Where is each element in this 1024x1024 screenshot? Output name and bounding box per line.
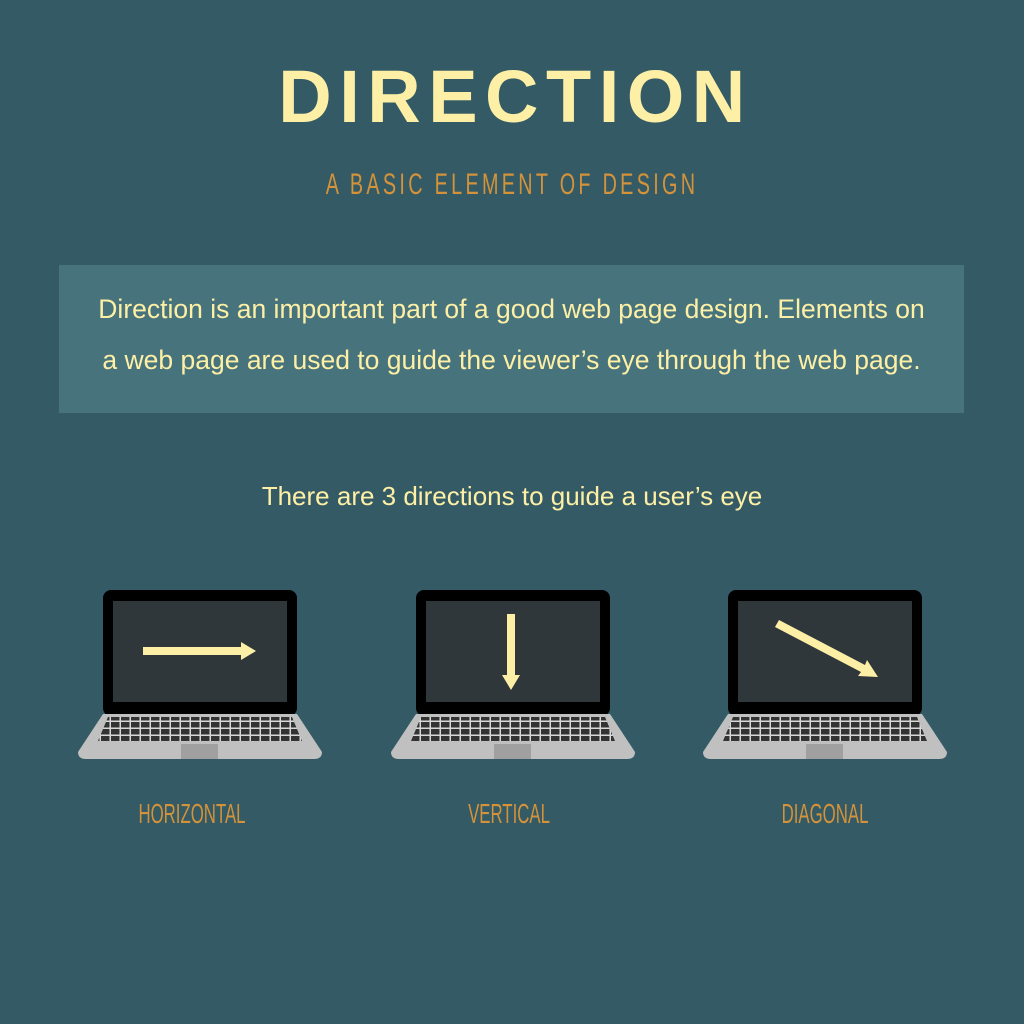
- lead text: There are 3 directions to guide a user’s eye: [262, 481, 762, 511]
- label: horizontal: HORIZONTAL: [138, 798, 246, 829]
- arrow: down: [502, 614, 520, 690]
- subtitle: A BASIC ELEMENT OF DESIGN: [326, 168, 698, 201]
- arrow: right: [143, 642, 256, 660]
- label: vertical: VERTICAL: [468, 798, 550, 829]
- intro box: Direction is an important part of a good web page design. Elements on: [98, 294, 925, 324]
- arrow: diagonal: [775, 620, 878, 677]
- laptop: horizontal: [78, 590, 322, 759]
- laptop: vertical: [391, 590, 635, 759]
- title: DIRECTION: [278, 55, 753, 138]
- intro box: a web page are used to guide the viewer’s eye through the web page.: [102, 345, 921, 375]
- intro box: [59, 265, 964, 413]
- laptop: diagonal: [703, 590, 947, 759]
- label: diagonal: DIAGONAL: [782, 798, 868, 829]
